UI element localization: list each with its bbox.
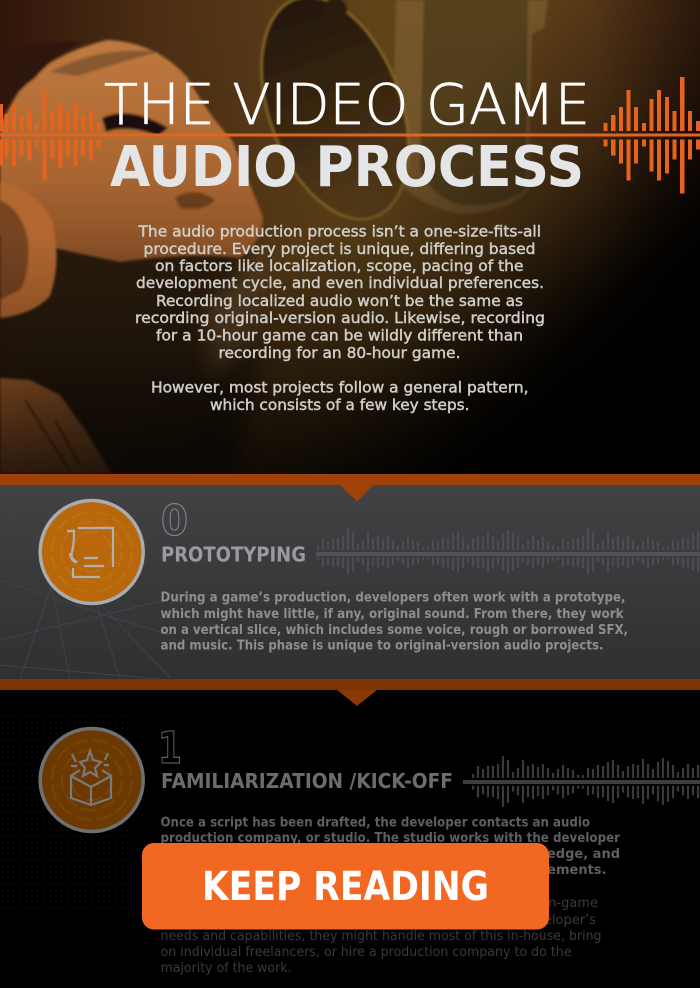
- title: [104, 73, 590, 200]
- headphone: [0, 182, 57, 318]
- neck highlight: [205, 240, 262, 380]
- keep reading button: [142, 843, 549, 930]
- body text: During a game’s production, developers often work with a prototype,: [160, 590, 626, 606]
- audio waveform: [463, 756, 700, 807]
- panel background: [0, 474, 700, 690]
- step number 1: 1: [158, 723, 182, 774]
- icon: script page: [40, 500, 143, 604]
- pop filter: [259, 0, 410, 222]
- intro text: which consists of a few key steps.: [210, 396, 470, 414]
- title: AUDIO PROCESS: [110, 135, 584, 200]
- panel: step 1 familiarization: [0, 690, 700, 976]
- intro text: [135, 222, 545, 414]
- intro text: on factors like localization, scope, pacing of the: [155, 257, 524, 275]
- faded body text: majority of the work.: [160, 961, 292, 976]
- sound wave: right: [604, 77, 700, 194]
- faded body text: n-game: [548, 896, 598, 911]
- audio waveform: [316, 528, 700, 575]
- head: [0, 40, 263, 262]
- intro text: However, most projects follow a general pattern,: [151, 378, 528, 396]
- hero photo: singer at microphone: [0, 0, 700, 474]
- keep reading button: KEEP READING: [202, 864, 489, 910]
- title: THE VIDEO GAME: [104, 73, 590, 138]
- heading: PROTOTYPING: [161, 542, 306, 566]
- faded body text: [160, 896, 602, 976]
- intro text: Recording localized audio won’t be the same as: [156, 292, 523, 310]
- body text: [160, 816, 621, 878]
- intro text: The audio production process isn’t a one-size-fits-all: [137, 222, 541, 240]
- intro text: for a 10-hour game can be wildly different than: [156, 326, 523, 344]
- faded body text: eloper’s: [544, 913, 596, 928]
- shirt collar: [0, 378, 112, 474]
- icon: box with star: [40, 728, 143, 832]
- body text: rements.: [541, 863, 606, 878]
- intro text: procedure. Every project is unique, differing based: [144, 240, 536, 258]
- body text: which might have little, if any, original sound. From there, they work: [160, 607, 624, 622]
- sound wave: left: [0, 90, 100, 180]
- body text: production company, or studio. The studio works with the developer: [160, 831, 621, 846]
- body text: Once a script has been drafted, the developer contacts an audio: [160, 816, 590, 830]
- panel: hero: [0, 0, 700, 474]
- neck and torso shadow: [24, 240, 266, 464]
- body text: and music. This phase is unique to original-version audio projects.: [160, 638, 604, 654]
- notch arrow: [337, 690, 377, 706]
- intro text: recording original-version audio. Likewise, recording: [135, 309, 545, 327]
- body text: [160, 590, 628, 654]
- heading: FAMILIARIZATION /KICK-OFF: [161, 769, 453, 793]
- intro text: recording for an 80-hour game.: [218, 344, 460, 362]
- title rule: [0, 134, 700, 136]
- body text: ledge, and: [542, 847, 620, 862]
- intro text: development cycle, and even individual preferences.: [136, 274, 544, 292]
- step number 0: 0: [161, 496, 188, 545]
- panel: step 0 prototyping: [0, 474, 700, 690]
- microphone body: [392, 0, 548, 214]
- faded body text: on individual freelancers, or hire a production company to do the: [160, 945, 572, 960]
- body text: on a vertical slice, which includes some voice, rough or borrowed SFX,: [160, 623, 628, 638]
- faded body text: needs and capabilities, they might handle most of this in-house, bring: [160, 929, 602, 944]
